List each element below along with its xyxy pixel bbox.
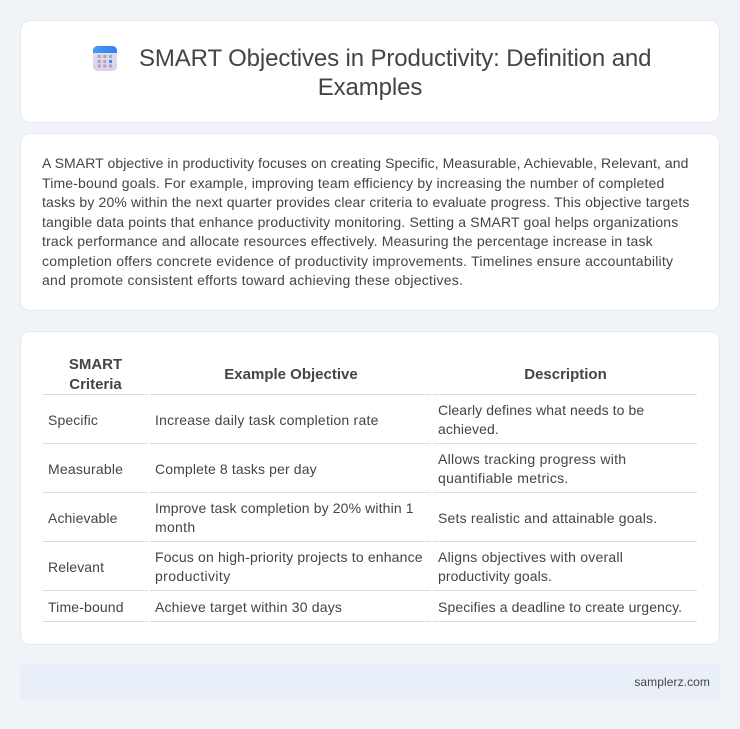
intro paragraph: Time-bound goals. For example, improving team efficiency by increasing the number of completed [42, 174, 664, 190]
intro paragraph: and promote consistent efforts toward achieving these objectives. [42, 272, 463, 288]
row: Measurable: Measurable [48, 461, 123, 477]
column heading: SMART Criteria: Criteria [69, 376, 122, 393]
row: Achievable: month [155, 519, 195, 535]
row: Time-bound: Specifies a deadline to create urgency. [438, 599, 682, 615]
table header row [69, 356, 607, 393]
column heading: SMART Criteria: SMART [69, 356, 122, 373]
row: Measurable: Allows tracking progress with [438, 451, 626, 467]
intro paragraph: completion offers concrete evidence of productivity improvements. Timelines ensure accountability [42, 252, 673, 268]
row: Achievable [48, 500, 657, 535]
intro paragraph: A SMART objective in productivity focuses on creating Specific, Measurable, Achievable, Relevant, and [42, 155, 688, 171]
row: Time-bound: Time-bound [48, 599, 124, 615]
row: Relevant [48, 549, 623, 584]
column heading: SMART Criteria [69, 356, 122, 393]
row: Specific [48, 402, 644, 437]
title: SMART Objectives in Productivity: Definition and [139, 45, 651, 72]
row: Relevant: Focus on high-priority projects to enhance [155, 549, 423, 565]
row: Measurable: Complete 8 tasks per day [155, 461, 317, 477]
row: Achievable: Sets realistic and attainable goals. [438, 510, 657, 526]
row: Relevant: Relevant [48, 559, 104, 575]
row: Specific: Specific [48, 412, 98, 428]
title [139, 45, 651, 101]
intro paragraph: track performance and allocate resources effectively. Measuring the percentage increase in task [42, 233, 653, 249]
column heading: Description: Description [524, 366, 607, 383]
row: Relevant: Aligns objectives with overall [438, 549, 623, 565]
row: Specific: achieved. [438, 421, 499, 437]
row: Measurable: quantifiable metrics. [438, 470, 569, 486]
row: Time-bound [48, 599, 682, 615]
table panel [20, 331, 720, 645]
intro paragraph [42, 155, 690, 288]
row: Specific: Clearly defines what needs to be [438, 402, 644, 418]
row: Relevant: productivity [155, 568, 231, 584]
intro text panel [20, 133, 720, 311]
intro paragraph: tasks by 20% within the next quarter provides clear criteria to evaluate progress. This objective targets [42, 194, 690, 210]
row: Achievable: Achievable [48, 510, 118, 526]
title: Examples [318, 74, 422, 101]
row: Measurable [48, 451, 626, 486]
intro paragraph: tangible data points that enhance productivity monitoring. Setting a SMART goal helps organizations [42, 214, 678, 230]
row: Time-bound: Achieve target within 30 days [155, 599, 342, 615]
footer source text: samplerz.com [634, 675, 710, 689]
row: Relevant: productivity goals. [438, 568, 552, 584]
row: Achievable: Improve task completion by 20% within 1 [155, 500, 414, 516]
footer bar [20, 665, 720, 699]
header panel [20, 20, 720, 123]
column heading: Example Objective: Example Objective [224, 366, 358, 383]
row: Specific: Increase daily task completion rate [155, 412, 379, 428]
icon: calendar [93, 46, 117, 71]
